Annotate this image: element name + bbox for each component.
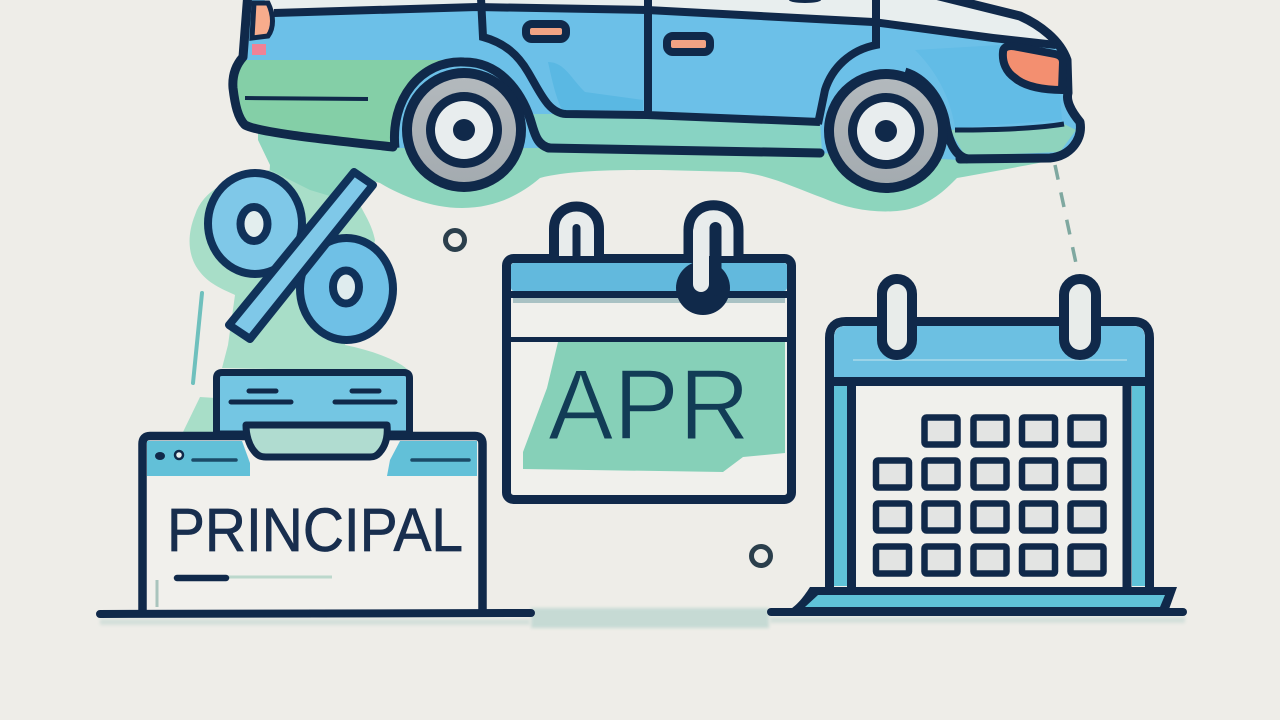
faint tick bbox=[156, 580, 158, 607]
base strip bbox=[805, 595, 1165, 607]
date grid bbox=[876, 418, 1104, 574]
header line bbox=[511, 291, 787, 298]
calendar base bbox=[785, 587, 1177, 612]
door lines bbox=[481, 0, 876, 124]
ground shadow left bbox=[100, 619, 530, 625]
rear wheel bbox=[824, 69, 948, 193]
heading: APR: APR bbox=[548, 349, 750, 461]
rear fender shading bbox=[915, 45, 1062, 128]
side skirt bbox=[530, 114, 822, 152]
right ring bbox=[676, 205, 738, 315]
ground line left bbox=[100, 613, 531, 614]
calendar header band bbox=[834, 326, 1145, 377]
red marker bbox=[252, 44, 266, 55]
folder tray bbox=[216, 372, 410, 434]
icon: percent sign bbox=[208, 172, 393, 340]
car body bbox=[233, 0, 1080, 160]
divider line bbox=[511, 337, 787, 342]
darker door shading bbox=[548, 62, 643, 110]
tray lines bbox=[231, 391, 395, 402]
left folder tab bbox=[147, 441, 250, 476]
right side strip bbox=[1132, 386, 1145, 586]
rings bbox=[882, 279, 1096, 355]
rear wheel arch bbox=[905, 72, 968, 159]
line near percent bbox=[193, 293, 202, 383]
door handles bbox=[526, 24, 566, 39]
header and side lines bbox=[830, 381, 1149, 590]
ground line right bbox=[771, 608, 1183, 616]
panel: monthly calendar bbox=[785, 279, 1177, 612]
roof line bbox=[274, 7, 1056, 45]
calendar band bbox=[511, 263, 787, 291]
right folder tab bbox=[387, 441, 477, 476]
ground shadow centre bbox=[531, 608, 769, 628]
left side strip bbox=[834, 386, 847, 586]
band shadow bbox=[513, 298, 785, 303]
progress line bbox=[177, 575, 226, 581]
folder body bbox=[142, 436, 482, 613]
decorative dot bbox=[446, 230, 464, 250]
windows bbox=[262, 0, 1056, 46]
panel: principal folder bbox=[142, 372, 482, 613]
tab lines bbox=[193, 458, 469, 462]
rear skirt line bbox=[955, 124, 1064, 130]
car outline bbox=[233, 0, 1080, 159]
dashed line from car to calendar bbox=[1055, 165, 1077, 268]
calendar frame bbox=[506, 258, 792, 500]
tab dots bbox=[155, 451, 183, 460]
green patch behind APR bbox=[523, 342, 785, 472]
bumper crease line bbox=[245, 98, 368, 99]
rear skirt bbox=[950, 124, 1076, 156]
front bumper green panel bbox=[236, 60, 452, 146]
head light bbox=[252, 3, 272, 38]
folder clip bbox=[246, 425, 387, 457]
front wheel arch bbox=[394, 62, 550, 148]
front wheel bbox=[402, 68, 526, 192]
header highlight bbox=[853, 359, 1127, 361]
decorative dot bbox=[752, 546, 770, 566]
progress line track bbox=[226, 576, 332, 578]
icon: car bbox=[233, 0, 1080, 193]
tail light bbox=[1003, 46, 1063, 90]
ground shadow right bbox=[770, 617, 1185, 623]
green shadow under car bbox=[183, 130, 1060, 432]
heading: PRINCIPAL: PRINCIPAL bbox=[167, 496, 463, 564]
calendar frame bbox=[830, 322, 1150, 590]
panel: APR calendar bbox=[506, 205, 792, 500]
top mirror bbox=[789, 0, 821, 3]
left ring bbox=[554, 206, 599, 256]
